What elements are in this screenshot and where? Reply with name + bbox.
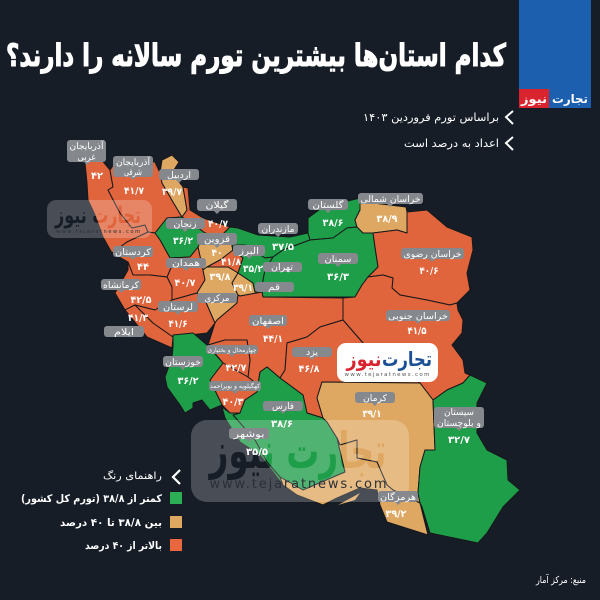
label: Ardabil bbox=[159, 169, 199, 198]
label: Mazandaran: ۳۷/۵ bbox=[272, 242, 294, 253]
legend heading: راهنمای رنگ bbox=[103, 470, 162, 482]
label: Hamedan: همدان bbox=[172, 259, 200, 269]
label: Tehran: تهران bbox=[271, 263, 294, 273]
label: West Azerbaijan: غربی bbox=[78, 153, 96, 163]
label: Mazandaran bbox=[258, 223, 298, 253]
label: East Azerbaijan: شرقی bbox=[124, 168, 142, 178]
label: Yazd: ۴۶/۸ bbox=[298, 364, 320, 375]
label: Kohgiluyeh and Boyer-Ahmad: کهگیلویه و بویراحمد bbox=[210, 382, 260, 390]
label: Tehran: ۳۵/۲ bbox=[243, 264, 263, 275]
label: Khuzestan bbox=[163, 356, 203, 387]
label: Khuzestan: خوزستان bbox=[165, 358, 201, 368]
label: Hormozgan: هرمزگان bbox=[380, 491, 416, 503]
label: Kermanshah: کرمانشاه bbox=[103, 281, 140, 291]
label: Razavi Khorasan: خراسان رضوی bbox=[404, 250, 462, 260]
legend heading bbox=[103, 470, 180, 484]
label: Isfahan: ۴۴/۱ bbox=[263, 334, 283, 345]
label: Ardabil: ۳۹/۷ bbox=[162, 187, 182, 198]
label: Chaharmahal and Bakhtiari bbox=[206, 345, 258, 374]
legend row: above 40: بالاتر از ۴۰ درصد bbox=[85, 540, 162, 552]
label: Fars bbox=[263, 401, 303, 430]
label: Qazvin bbox=[197, 233, 237, 259]
logo card bbox=[337, 343, 438, 382]
source: منبع: مرکز آمار bbox=[535, 573, 586, 586]
label: Qom: قم bbox=[268, 283, 280, 293]
label: Golestan: گلستان bbox=[312, 199, 344, 211]
label: Chaharmahal and Bakhtiari: ۴۲/۷ bbox=[226, 363, 246, 374]
label: Isfahan bbox=[249, 315, 287, 345]
label: Ilam bbox=[104, 313, 148, 338]
label: Lorestan bbox=[158, 301, 198, 330]
label: Kohgiluyeh and Boyer-Ahmad: ۴۰/۳ bbox=[222, 397, 244, 408]
label: West Azerbaijan: آذربایجان bbox=[70, 140, 104, 152]
label: Alborz: البرز bbox=[238, 247, 259, 257]
label: Kerman bbox=[355, 392, 395, 420]
label: Isfahan: اصفهان bbox=[252, 317, 284, 327]
label: Markazi: مرکزی bbox=[204, 294, 230, 304]
label: North Khorasan: ۳۸/۹ bbox=[376, 214, 398, 225]
label: Razavi Khorasan bbox=[401, 248, 464, 277]
label: Hamedan bbox=[166, 258, 206, 289]
label: Qazvin: قزوین bbox=[204, 235, 230, 245]
label: North Khorasan: خراسان شمالی bbox=[360, 195, 420, 205]
label: East Azerbaijan: ۴۱/۷ bbox=[124, 186, 144, 197]
label: Kermanshah: ۴۲/۵ bbox=[130, 295, 152, 306]
label: Bushehr: بوشهر bbox=[232, 430, 264, 440]
logo card: تجارت bbox=[382, 347, 432, 371]
label: Tehran bbox=[243, 262, 302, 275]
label: South Khorasan: ۴۱/۵ bbox=[408, 326, 426, 337]
label: Mazandaran: مازندران bbox=[262, 225, 295, 235]
label: Fars: ۳۸/۶ bbox=[271, 419, 293, 430]
label: Ilam: ایلام bbox=[114, 328, 134, 338]
label: Lorestan: لرستان bbox=[163, 303, 193, 313]
watermark: large: www.tejaratnews.com bbox=[210, 477, 386, 492]
label: Qazvin: ۴۰ bbox=[212, 248, 222, 259]
label: North Khorasan bbox=[358, 193, 423, 225]
label: Kerman: کرمان bbox=[363, 394, 388, 404]
label: Kurdistan: ۴۴ bbox=[137, 262, 149, 273]
brand badge: تجارت bbox=[552, 92, 588, 106]
label: Chaharmahal and Bakhtiari: چهارمحال و بختیاری bbox=[208, 347, 257, 354]
subtitle: basis: براساس تورم فروردین ۱۴۰۳ bbox=[363, 111, 499, 124]
label: Kurdistan bbox=[113, 246, 153, 273]
label: Sistan and Baluchestan: ۳۲/۷ bbox=[448, 435, 470, 446]
label: Semnan bbox=[318, 253, 358, 283]
label: Markazi: ۳۹/۸ bbox=[210, 272, 230, 283]
legend row: middle range: بین ۳۸/۸ تا ۴۰ درصد bbox=[60, 517, 162, 529]
label: Gilan: گیلان bbox=[206, 199, 229, 211]
label: Khuzestan: ۳۶/۲ bbox=[178, 376, 198, 387]
label: Semnan: ۳۶/۳ bbox=[327, 272, 349, 283]
label: Semnan: سمنان bbox=[324, 255, 352, 265]
label: East Azerbaijan bbox=[113, 156, 153, 197]
label: South Khorasan bbox=[386, 310, 450, 337]
label: Ilam: ۴۱/۳ bbox=[128, 313, 148, 324]
label: Yazd bbox=[292, 347, 332, 375]
label: Sistan and Baluchestan bbox=[434, 407, 484, 446]
label: Razavi Khorasan: ۴۰/۶ bbox=[420, 266, 438, 277]
label: Kurdistan: کردستان bbox=[115, 248, 152, 258]
label: South Khorasan: خراسان جنوبی bbox=[388, 312, 448, 322]
logo card: نیوز bbox=[346, 347, 382, 371]
label: Hormozgan: ۳۹/۲ bbox=[386, 509, 406, 520]
legend bbox=[21, 470, 182, 552]
label: Lorestan: ۴۱/۶ bbox=[168, 319, 188, 330]
label: Golestan bbox=[308, 199, 348, 229]
watermark: small: www.tejaratnews.com bbox=[56, 229, 140, 235]
label: Bushehr bbox=[229, 428, 269, 458]
brand badge bbox=[519, 0, 591, 108]
label: Gilan: ۴۰/۷ bbox=[208, 219, 228, 230]
label: Zanjan: ۳۶/۲ bbox=[173, 236, 193, 247]
label: Alborz: ۴۱/۸ bbox=[221, 257, 241, 268]
logo card: www.tejaratnews.com bbox=[344, 372, 430, 378]
legend row: below national rate: کمتر از ۳۸/۸ (تورم کل کشور) bbox=[21, 493, 163, 505]
label: Ardabil: اردبیل bbox=[167, 171, 191, 181]
label: Qom bbox=[233, 282, 294, 294]
label: Golestan: ۳۸/۶ bbox=[322, 218, 344, 229]
label: Gilan bbox=[197, 199, 237, 230]
label: Markazi bbox=[197, 272, 237, 304]
label: East Azerbaijan: آذربایجان bbox=[116, 156, 150, 168]
watermark: large bbox=[191, 420, 409, 502]
label: Sistan and Baluchestan: و بلوچستان bbox=[437, 419, 481, 429]
label: Bushehr: ۳۵/۵ bbox=[246, 447, 268, 458]
label: Kerman: ۳۹/۱ bbox=[362, 409, 382, 420]
label: Fars: فارس bbox=[272, 402, 294, 412]
label: Zanjan: زنجان bbox=[174, 220, 196, 230]
label: Zanjan bbox=[166, 218, 205, 247]
label: Yazd: یزد bbox=[306, 348, 319, 358]
label: Qom: ۳۹/۱ bbox=[233, 283, 253, 294]
label: Kermanshah bbox=[101, 279, 152, 306]
label: Sistan and Baluchestan: سیستان bbox=[444, 408, 474, 418]
label: West Azerbaijan: ۴۲ bbox=[91, 171, 103, 182]
map of provinces bbox=[85, 155, 520, 543]
label: Hormozgan bbox=[378, 491, 418, 520]
subtitle: units: اعداد به درصد است bbox=[404, 137, 499, 150]
watermark: small bbox=[47, 200, 152, 238]
brand badge: نیوز bbox=[520, 92, 547, 107]
label: Kohgiluyeh and Boyer-Ahmad bbox=[209, 381, 261, 408]
label: West Azerbaijan bbox=[67, 140, 106, 182]
label: Hamedan: ۴۰/۷ bbox=[174, 278, 196, 289]
label: Alborz bbox=[221, 245, 265, 268]
